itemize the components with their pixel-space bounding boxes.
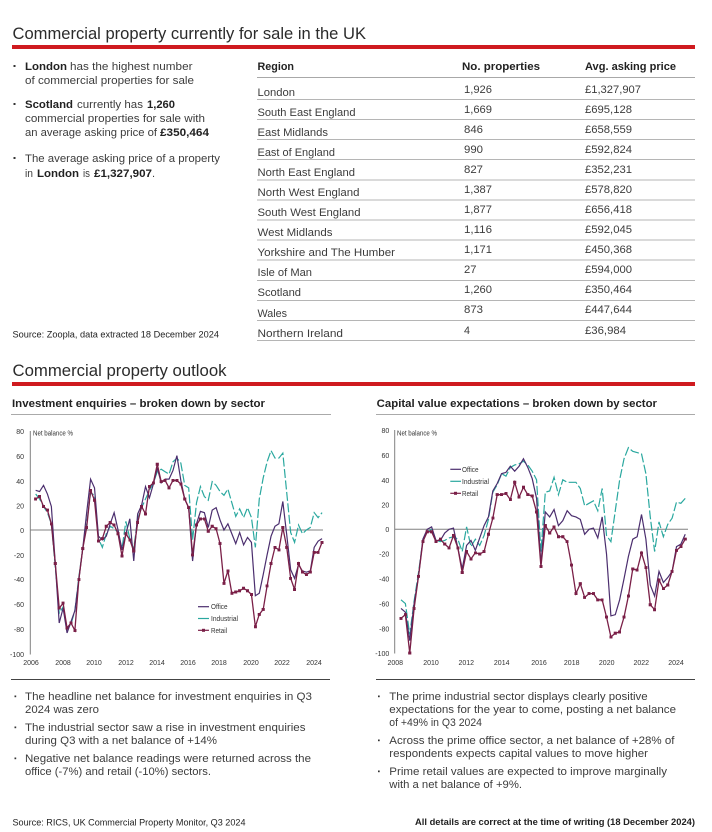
row: South West England: South West England (258, 207, 360, 219)
chart: capital value line chart (375, 428, 688, 667)
bullet: London average asking price: The average asking price of a property (25, 153, 221, 165)
bullet: Scotland figures: currently has (77, 99, 144, 111)
row: South West England: £656,418 (585, 204, 632, 216)
row: Scotland (258, 284, 632, 299)
x axis labels: 2010 (423, 660, 439, 667)
row: Yorkshire and The Humber (258, 244, 632, 259)
y axis labels: 20 (16, 504, 24, 510)
x axis labels: 2016 (180, 660, 196, 667)
legend (450, 467, 489, 498)
row: North West England (258, 184, 632, 199)
row: London: London (258, 87, 295, 99)
bullet: Scotland figures (14, 99, 210, 139)
table header: Avg. asking price (585, 61, 676, 73)
table header: Region (258, 61, 294, 73)
line: retail (36, 464, 322, 630)
row: East of England: East of England (258, 147, 335, 159)
row: Isle of Man: 27 (464, 264, 476, 276)
table: regions, number of properties, average asking price (257, 61, 695, 340)
line: office (401, 459, 685, 641)
row: East Midlands (258, 124, 632, 139)
row: Wales: Wales (258, 308, 287, 320)
bullet: Scotland figures: 1,260 (147, 99, 175, 111)
x axis labels: 2008 (55, 660, 71, 667)
bullet: Scotland figures: Scotland (25, 99, 73, 111)
line: retail (401, 482, 685, 653)
table header (257, 61, 695, 78)
text: capital value bullets: of +49% in Q3 2024 (389, 717, 482, 729)
row: East of England (258, 144, 632, 159)
bullet: London average asking price: London (37, 168, 79, 180)
legend: Retail (462, 491, 478, 498)
x axis labels: 2016 (531, 660, 547, 667)
bullet: London average asking price: is (83, 168, 90, 180)
text: capital value bullets: respondents expects capital values to move higher (389, 748, 648, 760)
row: Yorkshire and The Humber: £450,368 (585, 244, 632, 256)
text: investment enquiries bullets: during Q3 with a net balance of +14% (25, 735, 217, 747)
x axis labels: 2022 (274, 660, 290, 667)
text: capital value bullets: with a net balance of +9%. (388, 779, 522, 791)
row: Wales: 873 (464, 304, 483, 316)
bullet: London average asking price: . (152, 168, 155, 180)
row: East of England: £592,824 (585, 144, 632, 156)
footnote: correct at time of writing: All details are correct at the time of writing (18 December 2024) (415, 817, 695, 827)
legend (198, 604, 238, 635)
row: Northern Ireland: 4 (464, 325, 470, 337)
row: North East England: £352,231 (585, 164, 632, 176)
y axis labels: -60 (379, 602, 389, 608)
legend: Industrial (462, 479, 489, 486)
y axis labels: 0 (20, 528, 24, 535)
text: capital value bullets: Across the prime office sector, a net balance of +28% of (389, 735, 675, 747)
y axis labels: 80 (16, 429, 24, 436)
row: Wales (258, 304, 632, 320)
y axis labels (10, 429, 24, 659)
panel: investment enquiries (10, 398, 331, 778)
text: capital value bullets: Prime retail values are expected to improve marginally (389, 766, 668, 778)
row: Northern Ireland: £36,984 (585, 325, 626, 337)
row: West Midlands: 1,116 (464, 224, 492, 236)
x axis labels: 2008 (388, 660, 403, 667)
row: East Midlands: 846 (464, 124, 483, 136)
row: North East England (258, 164, 632, 179)
x axis labels: 2018 (564, 660, 580, 667)
y axis labels: 60 (16, 454, 24, 461)
x axis labels: 2012 (459, 660, 474, 667)
y axis labels: -80 (14, 627, 24, 634)
row: East of England: 990 (464, 144, 483, 156)
y axis labels: 20 (382, 502, 389, 510)
y axis labels: -100 (10, 652, 24, 659)
x axis labels: 2014 (494, 660, 510, 667)
row: Scotland: £350,464 (585, 284, 632, 296)
chart: investment enquiries line chart (10, 429, 323, 667)
row: West Midlands: £592,045 (585, 224, 632, 236)
y axis labels: 80 (382, 428, 389, 435)
row: South East England: £695,128 (585, 104, 632, 116)
bullet: Scotland figures: £350,464 (160, 127, 210, 139)
text: capital value bullets: The prime industrial sector displays clearly positive (389, 691, 648, 703)
panel: capital value expectations (375, 398, 695, 791)
row: East Midlands: £658,559 (585, 124, 632, 136)
title: commercial property outlook (12, 361, 695, 386)
y axis labels: -40 (379, 576, 389, 584)
row: West Midlands: West Midlands (258, 227, 333, 239)
table header: No. properties (462, 61, 540, 73)
y axis labels: -20 (14, 553, 24, 560)
y axis labels: -60 (14, 602, 24, 609)
x axis labels: 2022 (634, 660, 649, 667)
row: North West England: North West England (258, 187, 360, 199)
text: investment enquiries bullets: The industrial sector saw a rise in investment enquiries (25, 722, 306, 734)
source: Zoopla: Source: Zoopla, data extracted 18 December 2024 (12, 330, 219, 340)
heading: capital value expectations: Capital value expectations – broken down by sector (377, 398, 658, 410)
bullet: London average asking price (14, 153, 221, 180)
bullet: London highest number (14, 61, 194, 87)
row: West Midlands (258, 224, 632, 239)
row: North West England: £578,820 (585, 184, 632, 196)
row: North East England: North East England (258, 167, 355, 179)
bullet: London highest number: of commercial properties for sale (25, 75, 194, 87)
row: Northern Ireland (258, 325, 626, 340)
row: Isle of Man (258, 264, 632, 279)
y axis labels (375, 428, 389, 658)
row: South West England: 1,877 (464, 204, 492, 216)
bullet: Scotland figures: commercial properties for sale with (25, 113, 205, 125)
text: capital value bullets: expectations for the year to come, posting a net balance (389, 704, 676, 716)
row: Isle of Man: £594,000 (585, 264, 632, 276)
bullet: Scotland figures: an average asking price of (25, 127, 158, 139)
row: Scotland: 1,260 (464, 284, 492, 296)
row: London: 1,926 (464, 84, 492, 96)
bullet: London average asking price: in (25, 168, 33, 180)
line: industrial (36, 451, 322, 629)
x axis labels: 2006 (23, 660, 39, 667)
text: investment enquiries bullets: office (-7%) and retail (-10%) sectors. (25, 766, 211, 778)
row: East Midlands: East Midlands (258, 127, 329, 139)
x axis labels: 2020 (599, 660, 615, 667)
y axis labels: 60 (382, 453, 389, 460)
heading: investment enquiries: Investment enquiries – broken down by sector (12, 398, 266, 410)
row: South East England: South East England (258, 107, 356, 119)
row: North East England: 827 (464, 164, 483, 176)
y axis labels: -80 (379, 626, 389, 634)
row: Yorkshire and The Humber: 1,171 (464, 244, 492, 256)
text: investment enquiries bullets (14, 691, 312, 778)
row: Scotland: Scotland (258, 287, 301, 299)
y axis labels: 40 (382, 478, 389, 485)
y axis labels: -40 (14, 577, 24, 584)
title: commercial property currently for sale: Commercial property currently for sale in the UK (12, 24, 367, 43)
x axis labels: 2024 (306, 660, 322, 667)
title: commercial property outlook: Commercial property outlook (12, 361, 227, 380)
x axis labels (388, 660, 684, 667)
x axis labels: 2014 (149, 660, 165, 667)
x axis labels: 2010 (86, 660, 102, 667)
x axis labels (23, 660, 322, 667)
row: Northern Ireland: Northern Ireland (258, 328, 343, 340)
text: capital value bullets (378, 691, 676, 791)
row: Yorkshire and The Humber: Yorkshire and The Humber (258, 247, 395, 259)
legend: Retail (211, 628, 227, 635)
x axis labels: 2018 (211, 660, 227, 667)
text: investment enquiries bullets: 2024 was zero (25, 704, 99, 716)
axis title: Net balance % (33, 431, 73, 438)
row: North West England: 1,387 (464, 184, 492, 196)
legend: Office (211, 604, 228, 611)
row: London: £1,327,907 (585, 84, 641, 96)
legend: Industrial (211, 616, 238, 623)
bullet: London average asking price: £1,327,907 (94, 168, 152, 180)
row: London (258, 84, 641, 99)
line: industrial (401, 448, 685, 634)
bullet: London highest number: has the highest number (70, 61, 193, 73)
axis title: Net balance % (397, 431, 437, 438)
bullet: London highest number: London (25, 61, 67, 73)
x axis labels: 2024 (668, 660, 684, 667)
source: RICS: Source: RICS, UK Commercial Property Monitor, Q3 2024 (12, 818, 246, 828)
text: investment enquiries bullets: Negative net balance readings were returned across the (25, 753, 311, 765)
y axis labels: -20 (379, 552, 389, 558)
text: investment enquiries bullets: The headline net balance for investment enquiries in Q3 (25, 691, 312, 703)
y axis labels: -100 (375, 651, 389, 658)
y axis labels: 0 (385, 527, 389, 534)
x axis labels: 2020 (243, 660, 259, 667)
title: commercial property currently for sale (12, 24, 695, 49)
y axis labels: 40 (16, 479, 24, 486)
row: South East England (258, 104, 632, 119)
line: office (36, 456, 322, 633)
legend: Office (462, 467, 479, 474)
x axis labels: 2012 (118, 660, 134, 667)
row: Isle of Man: Isle of Man (258, 267, 312, 279)
row: South West England (258, 204, 632, 219)
row: Wales: £447,644 (585, 304, 632, 316)
panel: key points about properties for sale (14, 61, 221, 180)
row: South East England: 1,669 (464, 104, 492, 116)
